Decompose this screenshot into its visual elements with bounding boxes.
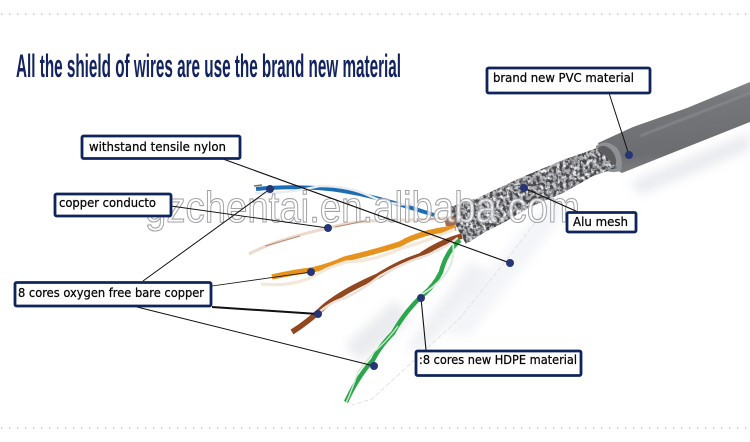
label: copper conductor: copper conducto xyxy=(59,196,156,210)
cable: aluminium mesh xyxy=(450,148,617,244)
label: withstand tensile nylon: withstand tensile nylon xyxy=(89,140,226,154)
label: Alu mesh xyxy=(567,212,636,232)
wire pair: blue xyxy=(254,185,434,215)
soft shadows under cable xyxy=(345,132,750,362)
label: withstand tensile nylon xyxy=(82,136,240,158)
cable: grey PVC jacket xyxy=(592,82,750,174)
wire pair: green xyxy=(346,240,460,403)
white foil strip xyxy=(352,206,548,405)
dotted rule: top xyxy=(1,13,750,15)
watermark: gzchentai.en.alibaba.com xyxy=(145,183,580,232)
label: copper conductor xyxy=(55,194,171,216)
wire pair: orange xyxy=(261,228,456,285)
label: brand new PVC material xyxy=(487,68,650,93)
leader lines xyxy=(137,93,629,366)
dotted rule: bottom xyxy=(1,427,750,429)
wire pair: brown xyxy=(292,236,462,332)
label: 8 cores oxygen free bare copper: 8 cores oxygen free bare copper xyxy=(18,286,204,300)
label: 8 cores new HDPE material: :8 cores new HDPE material xyxy=(419,353,577,367)
label: Alu mesh: Alu mesh xyxy=(573,215,628,229)
label: brand new PVC material: brand new PVC material xyxy=(493,71,634,85)
marker dots xyxy=(266,151,633,370)
label: 8 cores new HDPE material xyxy=(416,351,581,376)
wire: bare copper conductor xyxy=(249,216,458,254)
label: 8 cores oxygen free bare copper xyxy=(15,282,211,306)
